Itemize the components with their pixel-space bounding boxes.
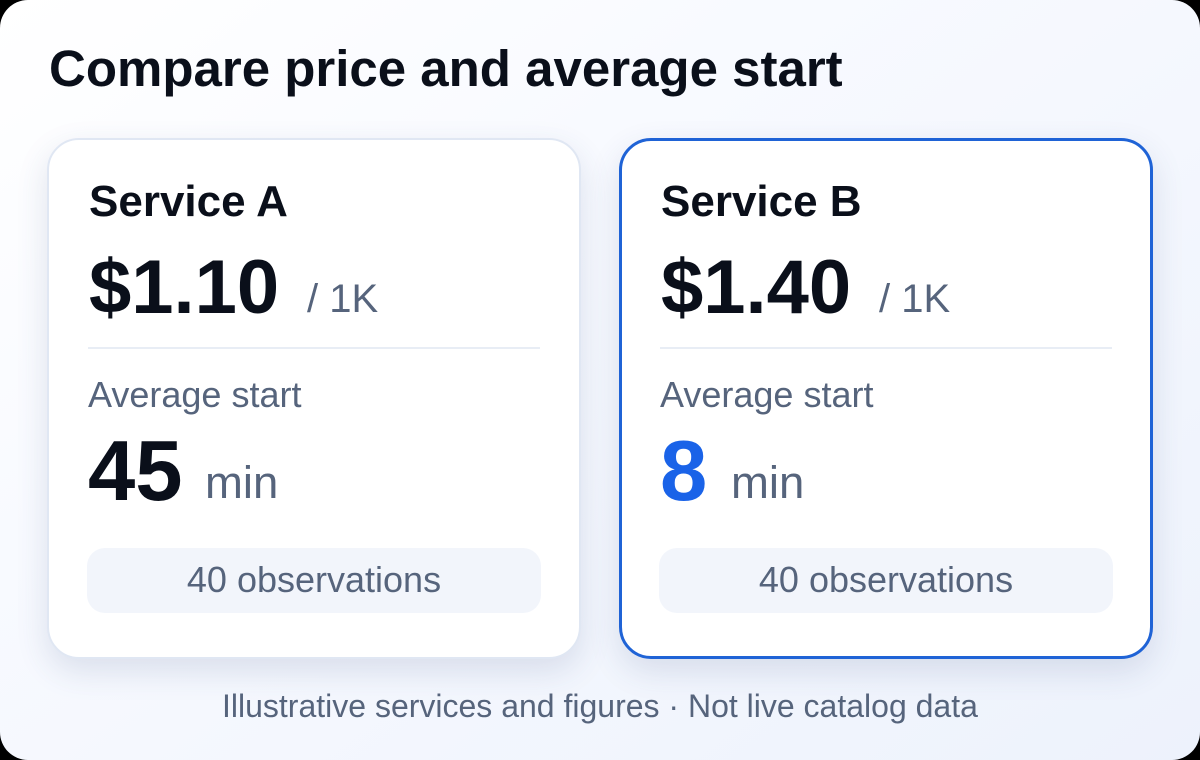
Service A average start label: Average start xyxy=(88,374,301,415)
Service B price unit: / 1K xyxy=(879,277,950,321)
Service A minutes unit: min xyxy=(205,457,278,508)
Service A observations pill xyxy=(87,548,541,613)
Service B price: $1.40 xyxy=(661,245,851,330)
Service B average start label: Average start xyxy=(660,374,873,415)
Service A name: Service A xyxy=(89,177,288,226)
Service A price: $1.10 xyxy=(89,245,279,330)
panel: Service B xyxy=(619,138,1153,659)
Service A average start value: 45 xyxy=(88,424,183,519)
Service B name: Service B xyxy=(661,177,862,226)
title: Compare price and average start xyxy=(49,40,843,97)
Service A observations pill: 40 observations xyxy=(187,559,441,600)
panel: Service A xyxy=(47,138,581,659)
footer note: Illustrative services and figures · Not live catalog data xyxy=(222,688,978,724)
Service B average start value: 8 xyxy=(660,424,707,519)
Service A price unit: / 1K xyxy=(307,277,378,321)
Service B minutes unit: min xyxy=(731,457,804,508)
Service B observations pill xyxy=(659,548,1113,613)
Service B observations pill: 40 observations xyxy=(759,559,1013,600)
